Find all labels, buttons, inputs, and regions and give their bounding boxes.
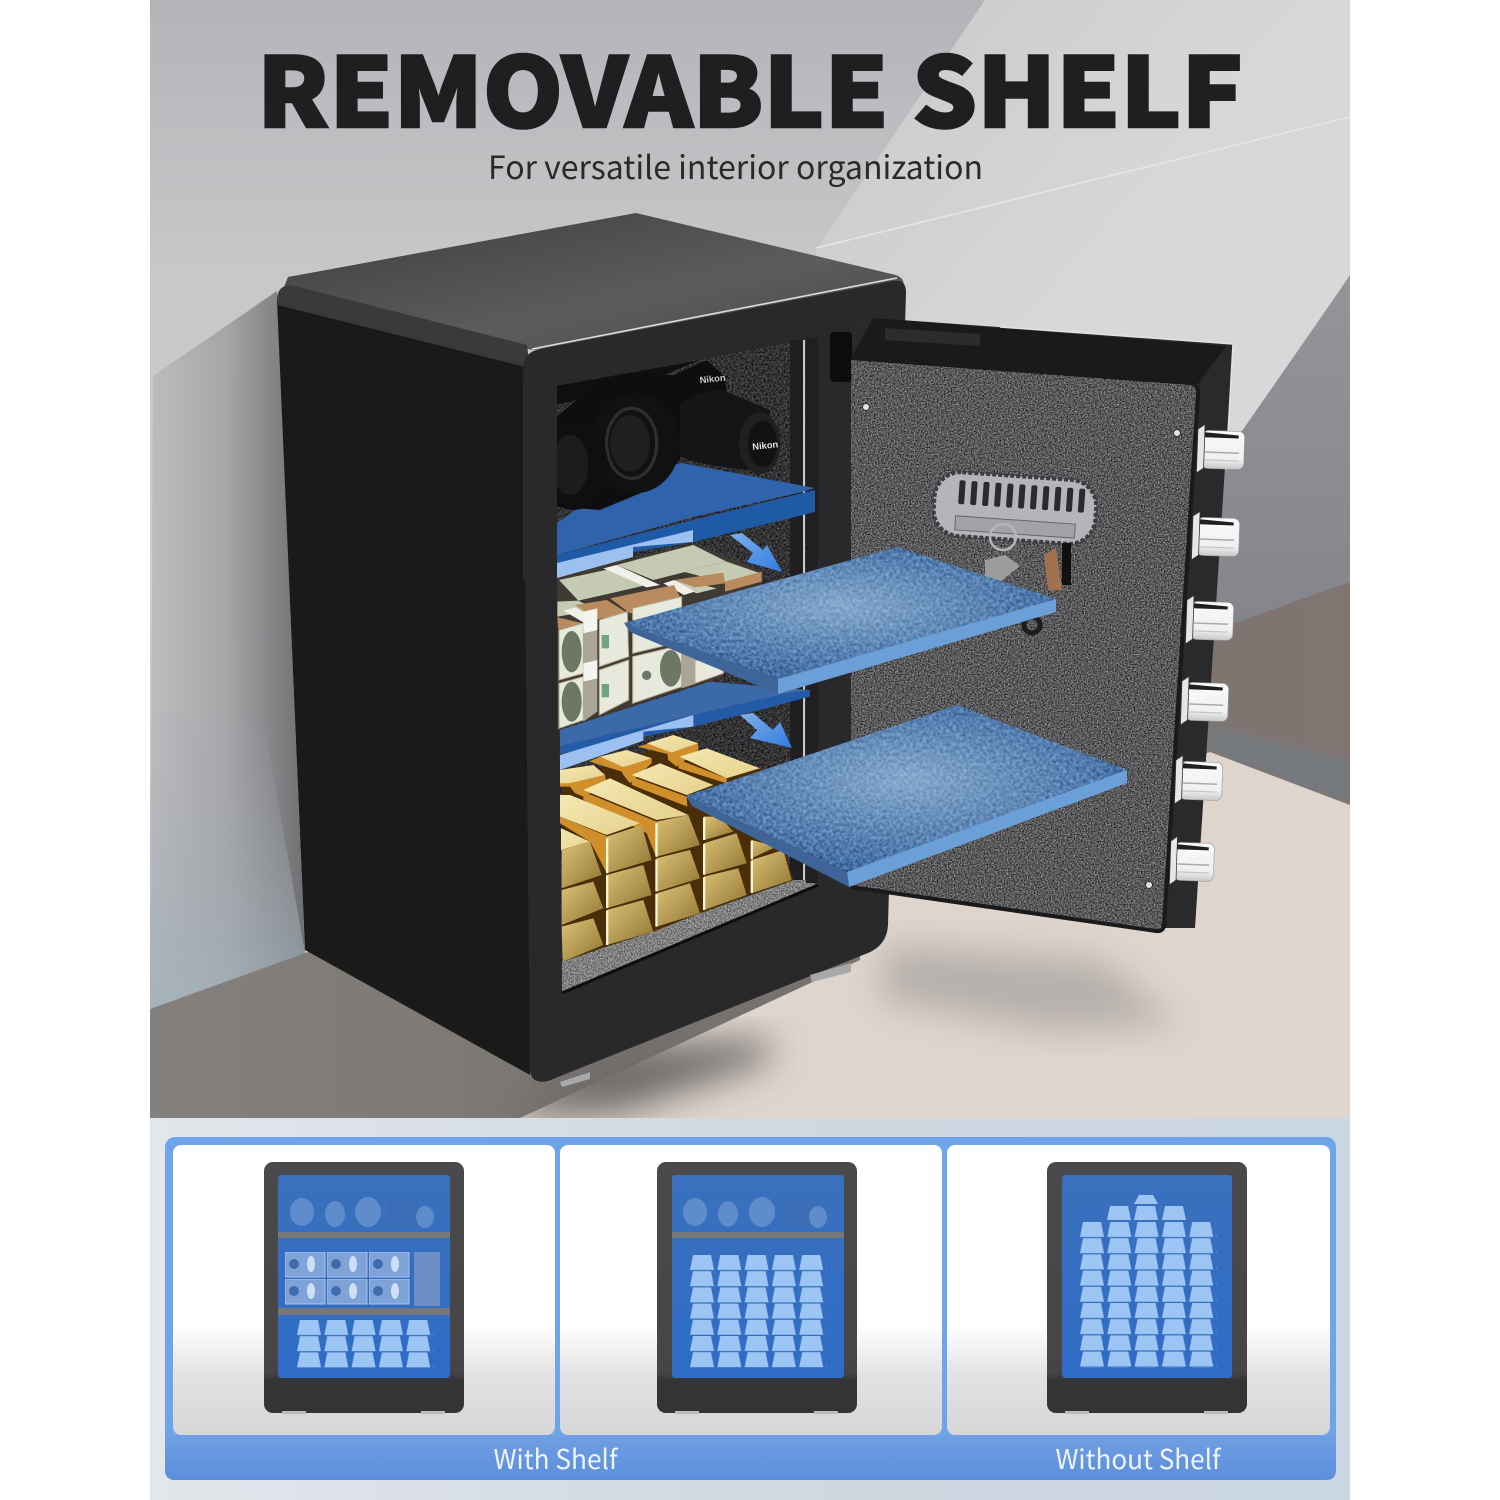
bill fronts: [559, 597, 723, 728]
side panel: [277, 300, 530, 1075]
brown bundle sides: [557, 572, 762, 629]
back shadow: [557, 543, 763, 730]
shadow bottom tint: [150, 777, 305, 1009]
rim highlight: [1000, 327, 1233, 470]
door shell: [852, 318, 1233, 928]
interior back wall: [556, 338, 818, 993]
frame highlight: [532, 278, 897, 349]
cameras ghost: [290, 1197, 434, 1228]
bill tops: [557, 545, 761, 617]
side lip: [277, 285, 530, 368]
bolt 2: [1191, 511, 1240, 562]
feet: [1065, 1411, 1089, 1414]
bolt 5: [1174, 755, 1223, 806]
sunlit wall region: [816, 0, 1350, 432]
recess detail: [885, 328, 980, 346]
cash: [285, 1252, 411, 1306]
gold: [690, 1255, 827, 1368]
gold bars: [560, 735, 793, 962]
mini safe: [657, 1162, 857, 1414]
bolt 3: [1185, 595, 1234, 646]
comparison panel: [165, 1137, 1336, 1480]
infographic canvas: [150, 0, 1350, 1500]
brand label front: Nikon: [752, 439, 779, 452]
lower inner shelf: [560, 682, 810, 770]
bright bar edges: [606, 817, 753, 945]
portraits: [562, 631, 681, 722]
door locking bolts: [1169, 424, 1245, 887]
arrow: upper shelf direction: [730, 533, 782, 572]
gold: [297, 1320, 434, 1368]
floor in shade: [150, 582, 1350, 1118]
shelf bars: [278, 1232, 450, 1238]
removed shelf: lower: [686, 705, 1127, 887]
blue-grey shade edge: [1210, 725, 1350, 805]
cameras on top shelf: [538, 360, 781, 510]
right lens barrel: [680, 391, 770, 472]
wall crease: [816, 117, 1350, 248]
feet: [282, 1411, 306, 1414]
interior floor: [562, 878, 818, 993]
top panel: [280, 213, 904, 350]
photo background: wall and floor: [150, 0, 1350, 1118]
hinge: [830, 332, 852, 382]
mini safe: [264, 1162, 464, 1414]
bolt 6: [1169, 836, 1215, 887]
label: with shelf: With Shelf: [494, 1438, 619, 1477]
keys: [985, 524, 1071, 633]
door top recess: [851, 318, 1226, 384]
front frame: [523, 281, 906, 1082]
brand label rear: Nikon: [699, 373, 726, 385]
orange side faces: [560, 743, 727, 873]
dark base: [562, 743, 793, 962]
shelf surface: [560, 682, 810, 746]
shelf dark front: [557, 490, 815, 565]
screws: [862, 404, 1180, 888]
shadow wedge on right wall: [1216, 275, 1350, 624]
arrow: lower shelf direction: [740, 713, 792, 748]
paper bands: [563, 565, 695, 623]
card: three compartments: [173, 1145, 555, 1435]
door: [851, 318, 1233, 931]
safe cast shadow on wall: [150, 291, 305, 1009]
shelf light strip: [560, 715, 693, 770]
feet: [675, 1411, 699, 1414]
safe body: [277, 213, 906, 1087]
bar fronts: [562, 815, 792, 962]
soft shadow near safe foot: [500, 1040, 770, 1118]
shelf rail: [790, 338, 818, 883]
bar tops: [560, 735, 760, 850]
gold upper rows: [1107, 1195, 1186, 1220]
label: without shelf: Without Shelf: [1056, 1438, 1222, 1477]
comparison panel backdrop: [150, 1118, 1350, 1500]
white band blocks: [583, 608, 597, 682]
cash stacks: [557, 543, 763, 730]
key holder plate: [932, 470, 1098, 546]
card: two compartments: [560, 1145, 942, 1435]
camera bodies: [557, 360, 727, 510]
removed shelf: upper: [624, 547, 1056, 694]
sunlit floor: [520, 752, 1350, 1118]
upper inner shelf surface: [557, 463, 815, 555]
gold lower rows: [1080, 1222, 1217, 1368]
blue frame: [165, 1137, 1336, 1480]
right lens cap: [739, 413, 781, 474]
title: REMOVABLE SHELF: [257, 16, 1243, 155]
middle lens: [590, 393, 680, 493]
card: no shelf: [947, 1145, 1330, 1435]
bolt 4: [1180, 676, 1229, 727]
interior ceiling shade: [556, 360, 700, 405]
wall: [150, 0, 985, 1000]
frame lower edge: [562, 885, 818, 993]
shelf light strip: [557, 530, 693, 578]
left lens: [538, 423, 608, 510]
inner liner speckled panel: [851, 358, 1197, 930]
cameras ghost: [683, 1197, 827, 1228]
shelf bar: [672, 1232, 844, 1238]
cover for left-edge frame behind cameras: [523, 380, 557, 580]
bolt 1: [1196, 424, 1245, 475]
green seals: [602, 635, 609, 697]
soft shadow under door: [880, 945, 1180, 1030]
band strips: [583, 618, 695, 722]
liner outline: [851, 358, 1198, 931]
mini safe: [1047, 1162, 1247, 1414]
feet: [560, 963, 851, 1087]
label strip: [165, 1436, 1336, 1480]
subtitle: For versatile interior organization: [488, 143, 983, 189]
shelf dark front: [560, 690, 810, 754]
upper inner shelf front edge: [557, 490, 815, 578]
